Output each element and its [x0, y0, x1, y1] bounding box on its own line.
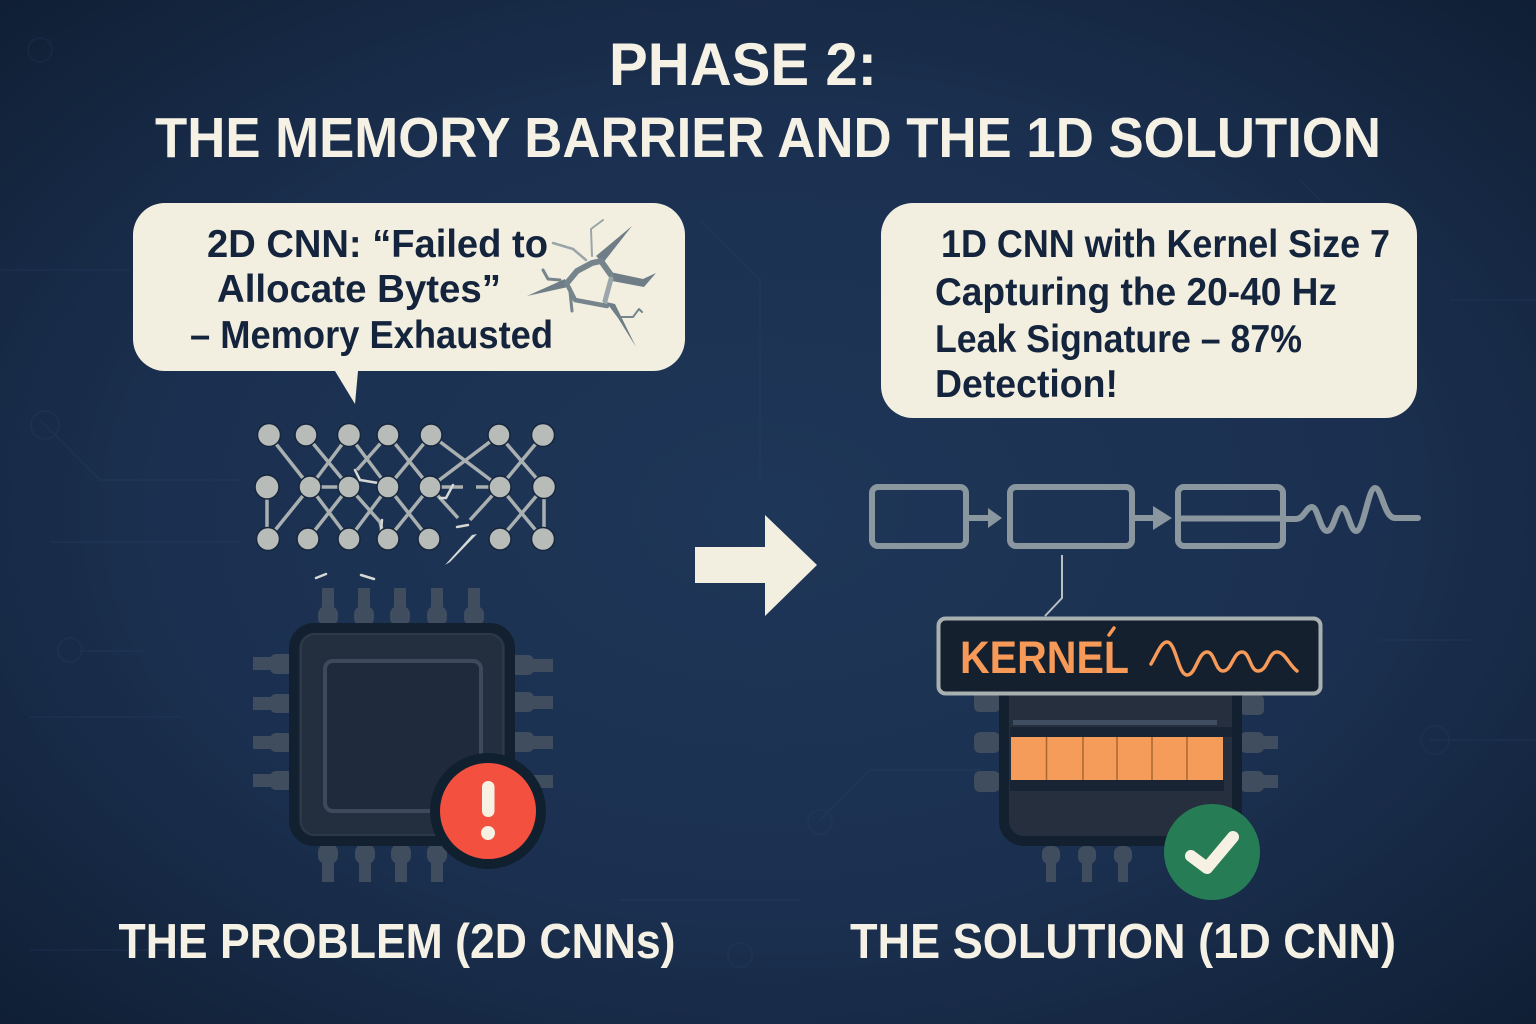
heading: the problem: THE PROBLEM (2D CNNs) — [118, 915, 676, 969]
problem bubble text — [190, 223, 553, 357]
solution bubble text: 1D CNN with Kernel Size 7 — [941, 223, 1390, 266]
solution bubble text: Detection! — [935, 363, 1118, 406]
icon: green check badge — [1164, 804, 1260, 900]
title: THE MEMORY BARRIER AND THE 1D SOLUTION — [155, 106, 1381, 170]
icon: overloaded chip — [253, 588, 553, 882]
icon: fractured neural network — [255, 424, 556, 579]
kernel accent mark — [1109, 628, 1114, 635]
title — [155, 31, 1381, 170]
icon: red alert badge — [430, 753, 546, 869]
solution bubble text: Capturing the 20-40 Hz — [935, 271, 1337, 314]
problem bubble text: Allocate Bytes” — [217, 268, 501, 311]
heading: the solution: THE SOLUTION (1D CNN) — [850, 915, 1396, 969]
panel: problem speech bubble — [133, 203, 685, 404]
title: PHASE 2: — [609, 31, 877, 98]
arrow: problem to solution — [695, 515, 817, 616]
kernel waveform — [1151, 642, 1297, 675]
broken shard — [445, 534, 477, 565]
solution bubble text — [935, 223, 1390, 406]
problem bubble text: – Memory Exhausted — [190, 314, 553, 357]
icon: solution chip — [974, 690, 1278, 882]
kernel strip — [1011, 737, 1223, 780]
solution bubble text: Leak Signature – 87% — [935, 318, 1302, 361]
problem bubble text: 2D CNN: “Failed to — [207, 223, 548, 266]
panel: solution speech bubble — [881, 203, 1417, 418]
diagram: 1D CNN pipeline — [872, 487, 1418, 546]
icon: crack — [527, 220, 656, 347]
connector: pipeline to kernel — [1045, 555, 1062, 616]
kernel label box — [938, 618, 1320, 694]
kernel text: KERNEL — [960, 632, 1129, 683]
